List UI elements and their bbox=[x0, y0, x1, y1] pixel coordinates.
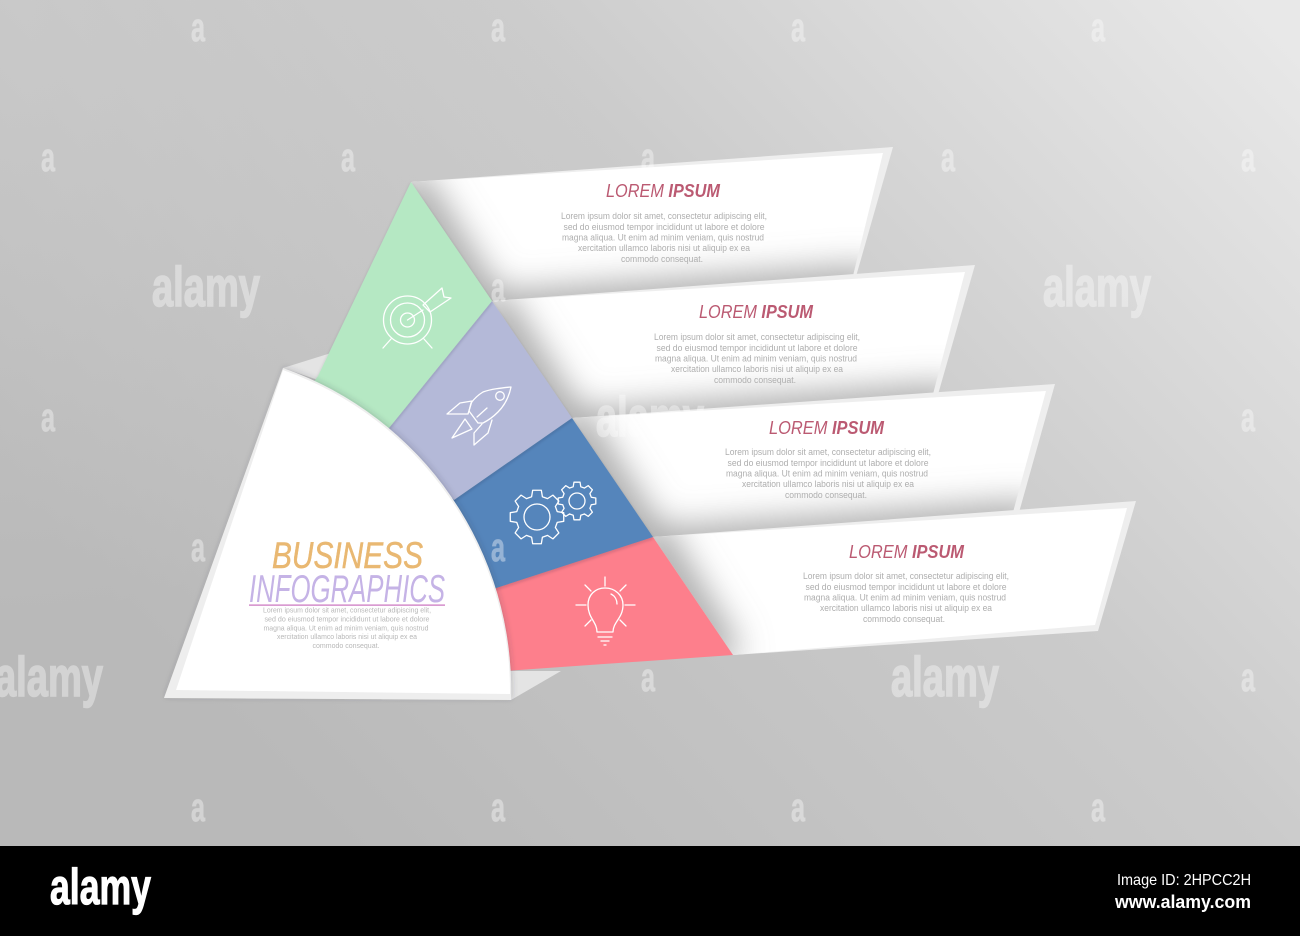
text: business body: xercitation ullamco laboris nisi ut aliquip ex ea bbox=[277, 632, 418, 641]
watermarks: a bbox=[791, 786, 805, 830]
text: business body: commodo consequat. bbox=[312, 641, 380, 650]
heading: business: BUSINESS bbox=[272, 535, 423, 576]
text: business body: sed do eiusmod tempor incididunt ut labore et dolore bbox=[264, 614, 430, 624]
segment: blue bbox=[440, 418, 653, 590]
text: card 2: magna aliqua. Ut enim ad minim veniam, quis nostrud bbox=[655, 354, 857, 364]
watermarks: alamy bbox=[152, 255, 260, 318]
panel: third card bbox=[566, 384, 1055, 548]
segment: green bbox=[300, 182, 492, 428]
footer bar bbox=[0, 846, 1300, 936]
icon: gears bbox=[510, 482, 596, 544]
text: card 1: commodo consequat. bbox=[621, 254, 703, 264]
watermarks: a bbox=[191, 526, 205, 570]
watermarks: a bbox=[41, 396, 55, 440]
footer logo: alamy bbox=[50, 859, 151, 915]
watermarks: a bbox=[941, 136, 955, 180]
text: card 1: sed do eiusmod tempor incididunt ut labore et dolore bbox=[564, 222, 764, 232]
fold: back top bbox=[283, 353, 331, 380]
text: card 2: xercitation ullamco laboris nisi ut aliquip ex ea bbox=[671, 364, 843, 374]
watermarks: a bbox=[41, 136, 55, 180]
text: card 1 bbox=[561, 211, 767, 264]
watermarks: a bbox=[1241, 656, 1255, 700]
watermarks: a bbox=[641, 136, 655, 180]
text: card 1: magna aliqua. Ut enim ad minim veniam, quis nostrud bbox=[562, 232, 764, 242]
icon: target bbox=[383, 288, 451, 348]
text: card 3: Lorem ipsum dolor sit amet, consectetur adipiscing elit, bbox=[725, 447, 931, 457]
text: card 4: commodo consequat. bbox=[863, 614, 945, 624]
heading: card 3: LOREM IPSUM bbox=[769, 418, 885, 438]
text: card 1: Lorem ipsum dolor sit amet, consectetur adipiscing elit, bbox=[561, 211, 767, 221]
text: card 4: sed do eiusmod tempor incididunt ut labore et dolore bbox=[806, 582, 1006, 592]
watermarks: a bbox=[791, 6, 805, 50]
watermarks: alamy bbox=[891, 645, 999, 708]
watermarks: a bbox=[191, 786, 205, 830]
watermarks: a bbox=[1091, 786, 1105, 830]
icon: light bulb bbox=[576, 577, 635, 645]
text: card 2: commodo consequat. bbox=[714, 375, 796, 385]
watermarks: a bbox=[491, 786, 505, 830]
text: card 3: magna aliqua. Ut enim ad minim veniam, quis nostrud bbox=[726, 468, 928, 478]
fold: back bottom bbox=[505, 671, 561, 700]
underline bbox=[249, 604, 445, 606]
text: card 1: xercitation ullamco laboris nisi ut aliquip ex ea bbox=[578, 243, 750, 253]
panel: top card bbox=[405, 147, 893, 312]
watermarks: a bbox=[341, 136, 355, 180]
watermarks: alamy bbox=[596, 385, 704, 448]
watermarks: a bbox=[491, 6, 505, 50]
text: card 3: xercitation ullamco laboris nisi ut aliquip ex ea bbox=[742, 479, 914, 489]
panel: business quarter bbox=[164, 368, 511, 700]
watermarks: a bbox=[191, 6, 205, 50]
watermarks: a bbox=[491, 266, 505, 310]
heading: card 1: LOREM IPSUM bbox=[606, 181, 721, 201]
text: card 4: xercitation ullamco laboris nisi ut aliquip ex ea bbox=[820, 603, 992, 613]
text: card 2: sed do eiusmod tempor incididunt ut labore et dolore bbox=[656, 343, 858, 353]
text: business body bbox=[263, 606, 431, 650]
watermarks: a bbox=[1091, 526, 1105, 570]
heading: infographics: INFOGRAPHICS bbox=[249, 568, 445, 611]
text: card 4 bbox=[803, 571, 1009, 624]
panel: fourth card bbox=[645, 501, 1136, 660]
text: business body: Lorem ipsum dolor sit amet, consectetur adipiscing elit, bbox=[263, 606, 431, 614]
text: card 2 bbox=[654, 332, 860, 385]
watermarks: alamy bbox=[1043, 255, 1151, 318]
text: business body: magna aliqua. Ut enim ad minim veniam, quis nostrud bbox=[264, 624, 428, 632]
watermarks: a bbox=[641, 656, 655, 700]
heading: card 2: LOREM IPSUM bbox=[699, 302, 814, 322]
footer image id: Image ID: 2HPCC2H bbox=[1117, 872, 1251, 889]
heading: card 4: LOREM IPSUM bbox=[849, 542, 965, 562]
watermarks: a bbox=[491, 526, 505, 570]
text: card 4: magna aliqua. Ut enim ad minim veniam, quis nostrud bbox=[804, 592, 1006, 602]
text: card 2: Lorem ipsum dolor sit amet, consectetur adipiscing elit, bbox=[654, 332, 860, 342]
text: card 3: sed do eiusmod tempor incididunt ut labore et dolore bbox=[728, 458, 928, 468]
panel: second card bbox=[487, 265, 975, 430]
watermarks: a bbox=[1091, 6, 1105, 50]
text: card 3 bbox=[725, 447, 931, 500]
footer url: www.alamy.com bbox=[1114, 892, 1251, 912]
watermarks: a bbox=[1241, 396, 1255, 440]
text: card 4: Lorem ipsum dolor sit amet, consectetur adipiscing elit, bbox=[803, 571, 1009, 581]
text: card 3: commodo consequat. bbox=[785, 490, 867, 500]
watermarks: a bbox=[1241, 136, 1255, 180]
icon: rocket bbox=[447, 387, 511, 445]
segment: pink bbox=[480, 537, 733, 671]
segment: lavender bbox=[375, 301, 572, 500]
